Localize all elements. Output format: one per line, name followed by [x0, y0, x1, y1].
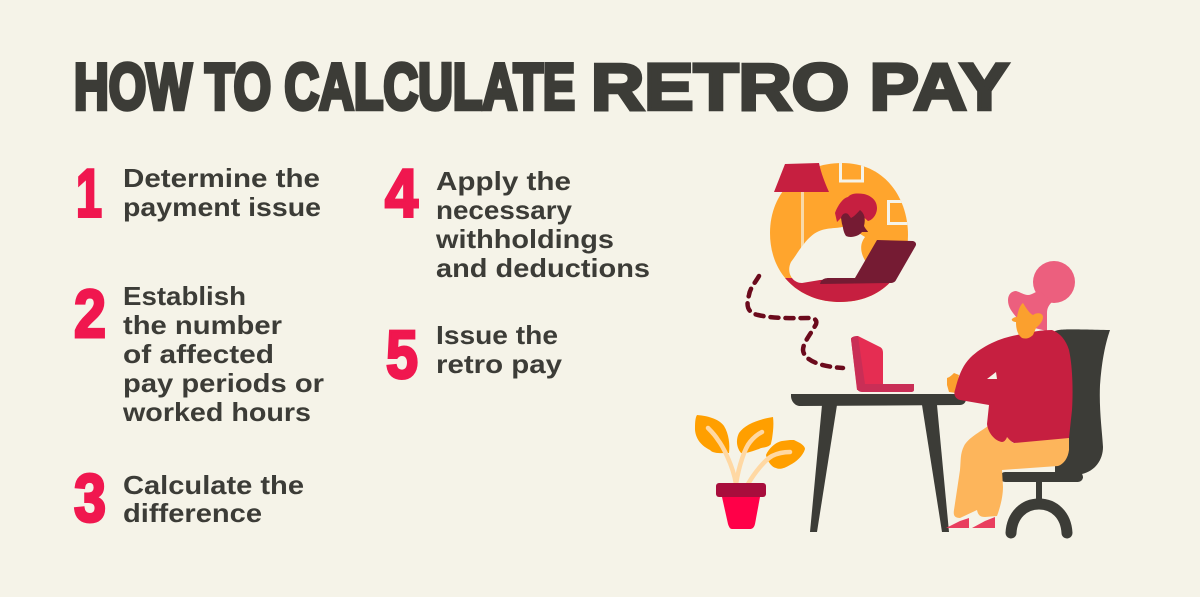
woman at desk [946, 261, 1075, 528]
step 5: Issue the [436, 320, 558, 350]
step 3: difference [123, 498, 262, 528]
step 4 [385, 156, 650, 283]
step 2: of affected [123, 339, 274, 369]
step 4: necessary [436, 195, 573, 225]
step 5: retro pay [436, 349, 563, 379]
step 1: Determine the [123, 163, 320, 193]
step 3: Calculate the [123, 470, 304, 500]
infographic canvas [74, 61, 1110, 538]
desk [791, 394, 966, 532]
step 4: and deductions [436, 253, 650, 283]
title: RETRO PAY [591, 50, 1009, 124]
office chair [1000, 329, 1110, 533]
step 1 [76, 156, 321, 232]
step 5 [386, 317, 563, 393]
step 2: Establish [123, 281, 246, 311]
illustration: thought bubble with remote worker [765, 160, 916, 308]
dashed connector line [748, 276, 843, 368]
step 2: 2 [74, 276, 106, 352]
step 4: withholdings [435, 224, 614, 254]
step 4: Apply the [436, 166, 571, 196]
step 5: 5 [386, 317, 418, 393]
potted plant [695, 415, 805, 529]
step 2 [74, 276, 324, 427]
step 4: 4 [385, 156, 418, 232]
small laptop on desk [851, 336, 914, 392]
step 2: worked hours [122, 397, 311, 427]
step 1: payment issue [123, 192, 321, 222]
step 3: 3 [74, 460, 106, 536]
step 1: 1 [76, 156, 102, 232]
step 3 [74, 460, 304, 536]
step 2: pay periods or [123, 368, 324, 398]
step 2: the number [123, 310, 282, 340]
title: HOW TO CALCULATE [74, 50, 575, 123]
